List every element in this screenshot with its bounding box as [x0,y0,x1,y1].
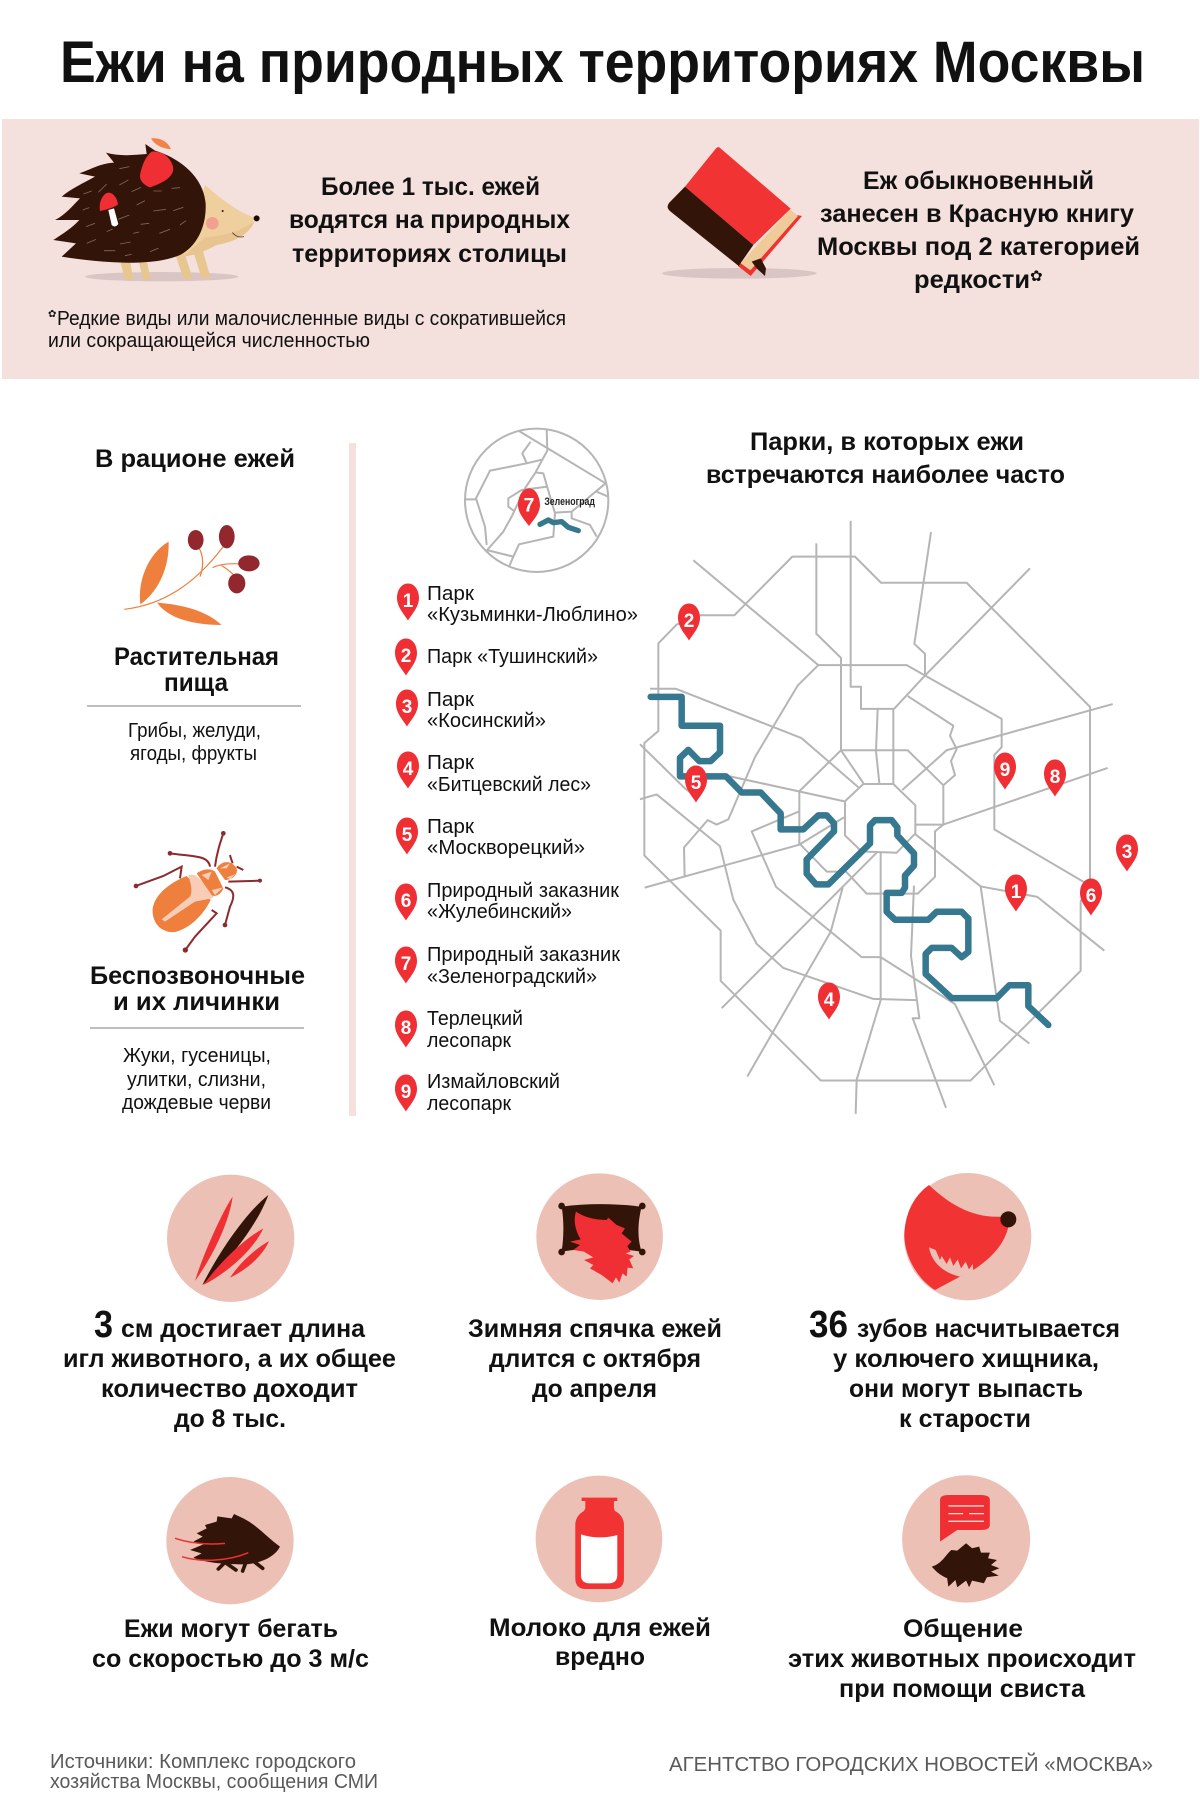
text: plant food: ягоды, фрукты [130,743,257,765]
text: communication [788,1615,1136,1703]
heading: parks: Парки, в которых ежи [750,428,1024,456]
legend item 7 [395,944,620,988]
text: speed [92,1615,369,1673]
footnote [48,308,566,352]
icon: red book [662,147,817,279]
heading: parks [706,428,1065,489]
river [651,697,1048,1025]
road network [640,521,1113,1114]
map of Moscow [640,521,1138,1114]
footnote: или сокращающейся численностью [48,330,370,352]
map pin 5: 5 [691,773,702,794]
text: invertebrates: Жуки, гусеницы, [123,1045,271,1067]
map pin 6: 6 [1086,886,1096,907]
icon: speech bubble and hedgehog [902,1475,1030,1603]
sources: Источники: Комплекс городского [50,1751,356,1773]
footnote: ✿ [48,309,56,320]
heading: diet: В рационе ежей [95,445,295,473]
legend item 4: Парк [427,752,474,774]
map pin 1 [1005,874,1027,912]
text: hibernation [468,1315,722,1403]
map pin 1: 1 [1011,882,1022,903]
map pin 2 [678,604,700,640]
text: red book status: занесен в Красную книгу [820,200,1134,228]
map pin 5 [685,766,707,802]
inset map: Zelenograd: Зеленоград [544,496,595,508]
legend item 5: Парк [427,816,474,838]
sources: хозяйства Москвы, сообщения СМИ [50,1771,378,1793]
legend item 3: Парк [427,689,474,711]
text: spines: количество доходит [101,1375,358,1403]
text: invertebrates: Беспозвоночные [90,962,305,990]
fact: milk [489,1476,711,1671]
legend item 1: «Кузьминки-Люблино» [427,604,638,626]
text: invertebrates: улитки, слизни, [127,1069,266,1091]
text: number of hedgehogs [289,173,570,268]
text: teeth: они могут выпасть [849,1375,1083,1403]
text: speed: Ежи могут бегать [124,1615,338,1643]
park legend [395,583,638,1115]
text: number of hedgehogs: Более 1 тыс. ежей [321,173,540,201]
legend item 3 [396,689,546,732]
legend item 7: «Зеленоградский» [427,966,597,988]
text: milk: вредно [555,1643,645,1671]
legend item 1: Парк [427,583,474,605]
text: spines: см достигает длина [121,1315,366,1343]
legend item 9: 9 [401,1082,411,1103]
text: teeth: 36 [809,1304,848,1346]
text: plant food: Грибы, желуди, [128,720,261,742]
icon: hedgehog [53,138,260,281]
legend item 6 [395,880,619,923]
icon: running hedgehog [166,1477,294,1604]
text: red book status: Еж обыкновенный [863,167,1094,195]
text: hibernation: до апреля [532,1375,657,1403]
legend item 8 [395,1008,523,1052]
icon: milk bottle [536,1476,662,1602]
legend item 5 [396,816,585,859]
map pin 4 [818,982,840,1020]
map pin 8 [1044,760,1066,796]
map pin 6 [1080,878,1102,916]
text: teeth: зубов насчитывается [857,1315,1120,1343]
text: communication: Общение [903,1615,1023,1643]
text: teeth [809,1304,1120,1433]
text: spines: игл животного, а их общее [63,1345,396,1373]
map pin 9: 9 [1000,760,1010,781]
text: spines: до 8 тыс. [174,1405,286,1433]
legend item 8: 8 [401,1018,411,1039]
icon: beetle [134,831,262,953]
map pin 4: 4 [824,990,835,1011]
map pin 2: 2 [684,611,694,632]
sources [50,1751,378,1793]
legend item 3: «Косинский» [427,710,546,732]
legend item 8: Терлецкий [427,1008,523,1030]
title: Ежи на природных территориях Москвы [60,30,1145,95]
icon: spines [167,1175,294,1302]
legend item 4: 4 [403,759,414,780]
fact: communication [788,1475,1136,1703]
legend item 7: 7 [401,954,411,975]
legend item 2 [395,638,598,676]
text: spines [63,1304,396,1433]
legend item 3: 3 [402,697,412,718]
agency credit: АГЕНТСТВО ГОРОДСКИХ НОВОСТЕЙ «МОСКВА» [669,1752,1153,1776]
footnote: Редкие виды или малочисленные виды с сократившейся [57,308,566,330]
icon: plant branch [124,525,260,625]
panel: key facts [2,119,1199,379]
text: hibernation: длится с октября [489,1345,701,1373]
legend item 6: «Жулебинский» [427,901,572,923]
legend item 9 [395,1071,560,1115]
text: communication: этих животных происходит [788,1645,1136,1673]
panel: diet [87,445,305,1114]
legend item 7: Природный заказник [427,944,620,966]
icon: snout [904,1173,1031,1300]
text: invertebrates: дождевые черви [122,1092,271,1114]
legend item 5: 5 [402,825,413,846]
legend item 4 [397,752,591,796]
legend item 2: 2 [401,646,411,667]
text: red book status: Москвы под 2 категорией [817,233,1140,261]
legend item 6: Природный заказник [427,880,619,902]
inset map: Zelenograd: 7 [524,496,534,517]
fact: teeth [809,1173,1120,1433]
text: red book status: редкости [914,266,1030,294]
map pin 3: 3 [1122,842,1132,863]
text: communication: при помощи свиста [839,1675,1086,1703]
text: plant food [87,643,301,765]
legend item 2: Парк «Тушинский» [427,646,598,668]
text: plant food: Растительная [114,643,279,671]
text: milk [489,1614,711,1671]
text: plant food: пища [164,669,229,697]
map pin 8: 8 [1050,767,1060,788]
text: milk: Молоко для ежей [489,1614,711,1642]
inset map: Zelenograd [465,429,608,572]
legend item 9: Измайловский [427,1071,560,1093]
text: invertebrates: и их личинки [113,988,280,1016]
legend item 1: 1 [403,591,414,612]
text: red book status [817,167,1140,294]
legend item 8: лесопарк [427,1030,511,1052]
text: number of hedgehogs: водятся на природных [289,206,570,234]
map pin 9 [994,752,1016,790]
legend item 5: «Москворецкий» [427,837,585,859]
text: spines: 3 [94,1304,113,1346]
fact: hibernation [468,1173,722,1403]
text: number of hedgehogs: территориях столицы [292,240,567,268]
legend item 9: лесопарк [427,1093,511,1115]
legend item 6: 6 [401,891,411,912]
text: teeth: у колючего хищника, [833,1345,1099,1373]
legend item 4: «Битцевский лес» [427,774,591,796]
text: red book status: ✿ [1030,268,1043,285]
icon: pillow [536,1173,663,1300]
heading: parks: встречаются наиболее часто [706,461,1065,489]
map pin 3 [1116,834,1138,872]
fact: speed [92,1477,369,1673]
text: speed: со скоростью до 3 м/с [92,1645,369,1673]
text: invertebrates [90,962,305,1114]
text: hibernation: Зимняя спячка ежей [468,1315,722,1343]
fact: spines [63,1175,396,1433]
text: teeth: к старости [899,1405,1031,1433]
legend item 1 [397,583,638,626]
